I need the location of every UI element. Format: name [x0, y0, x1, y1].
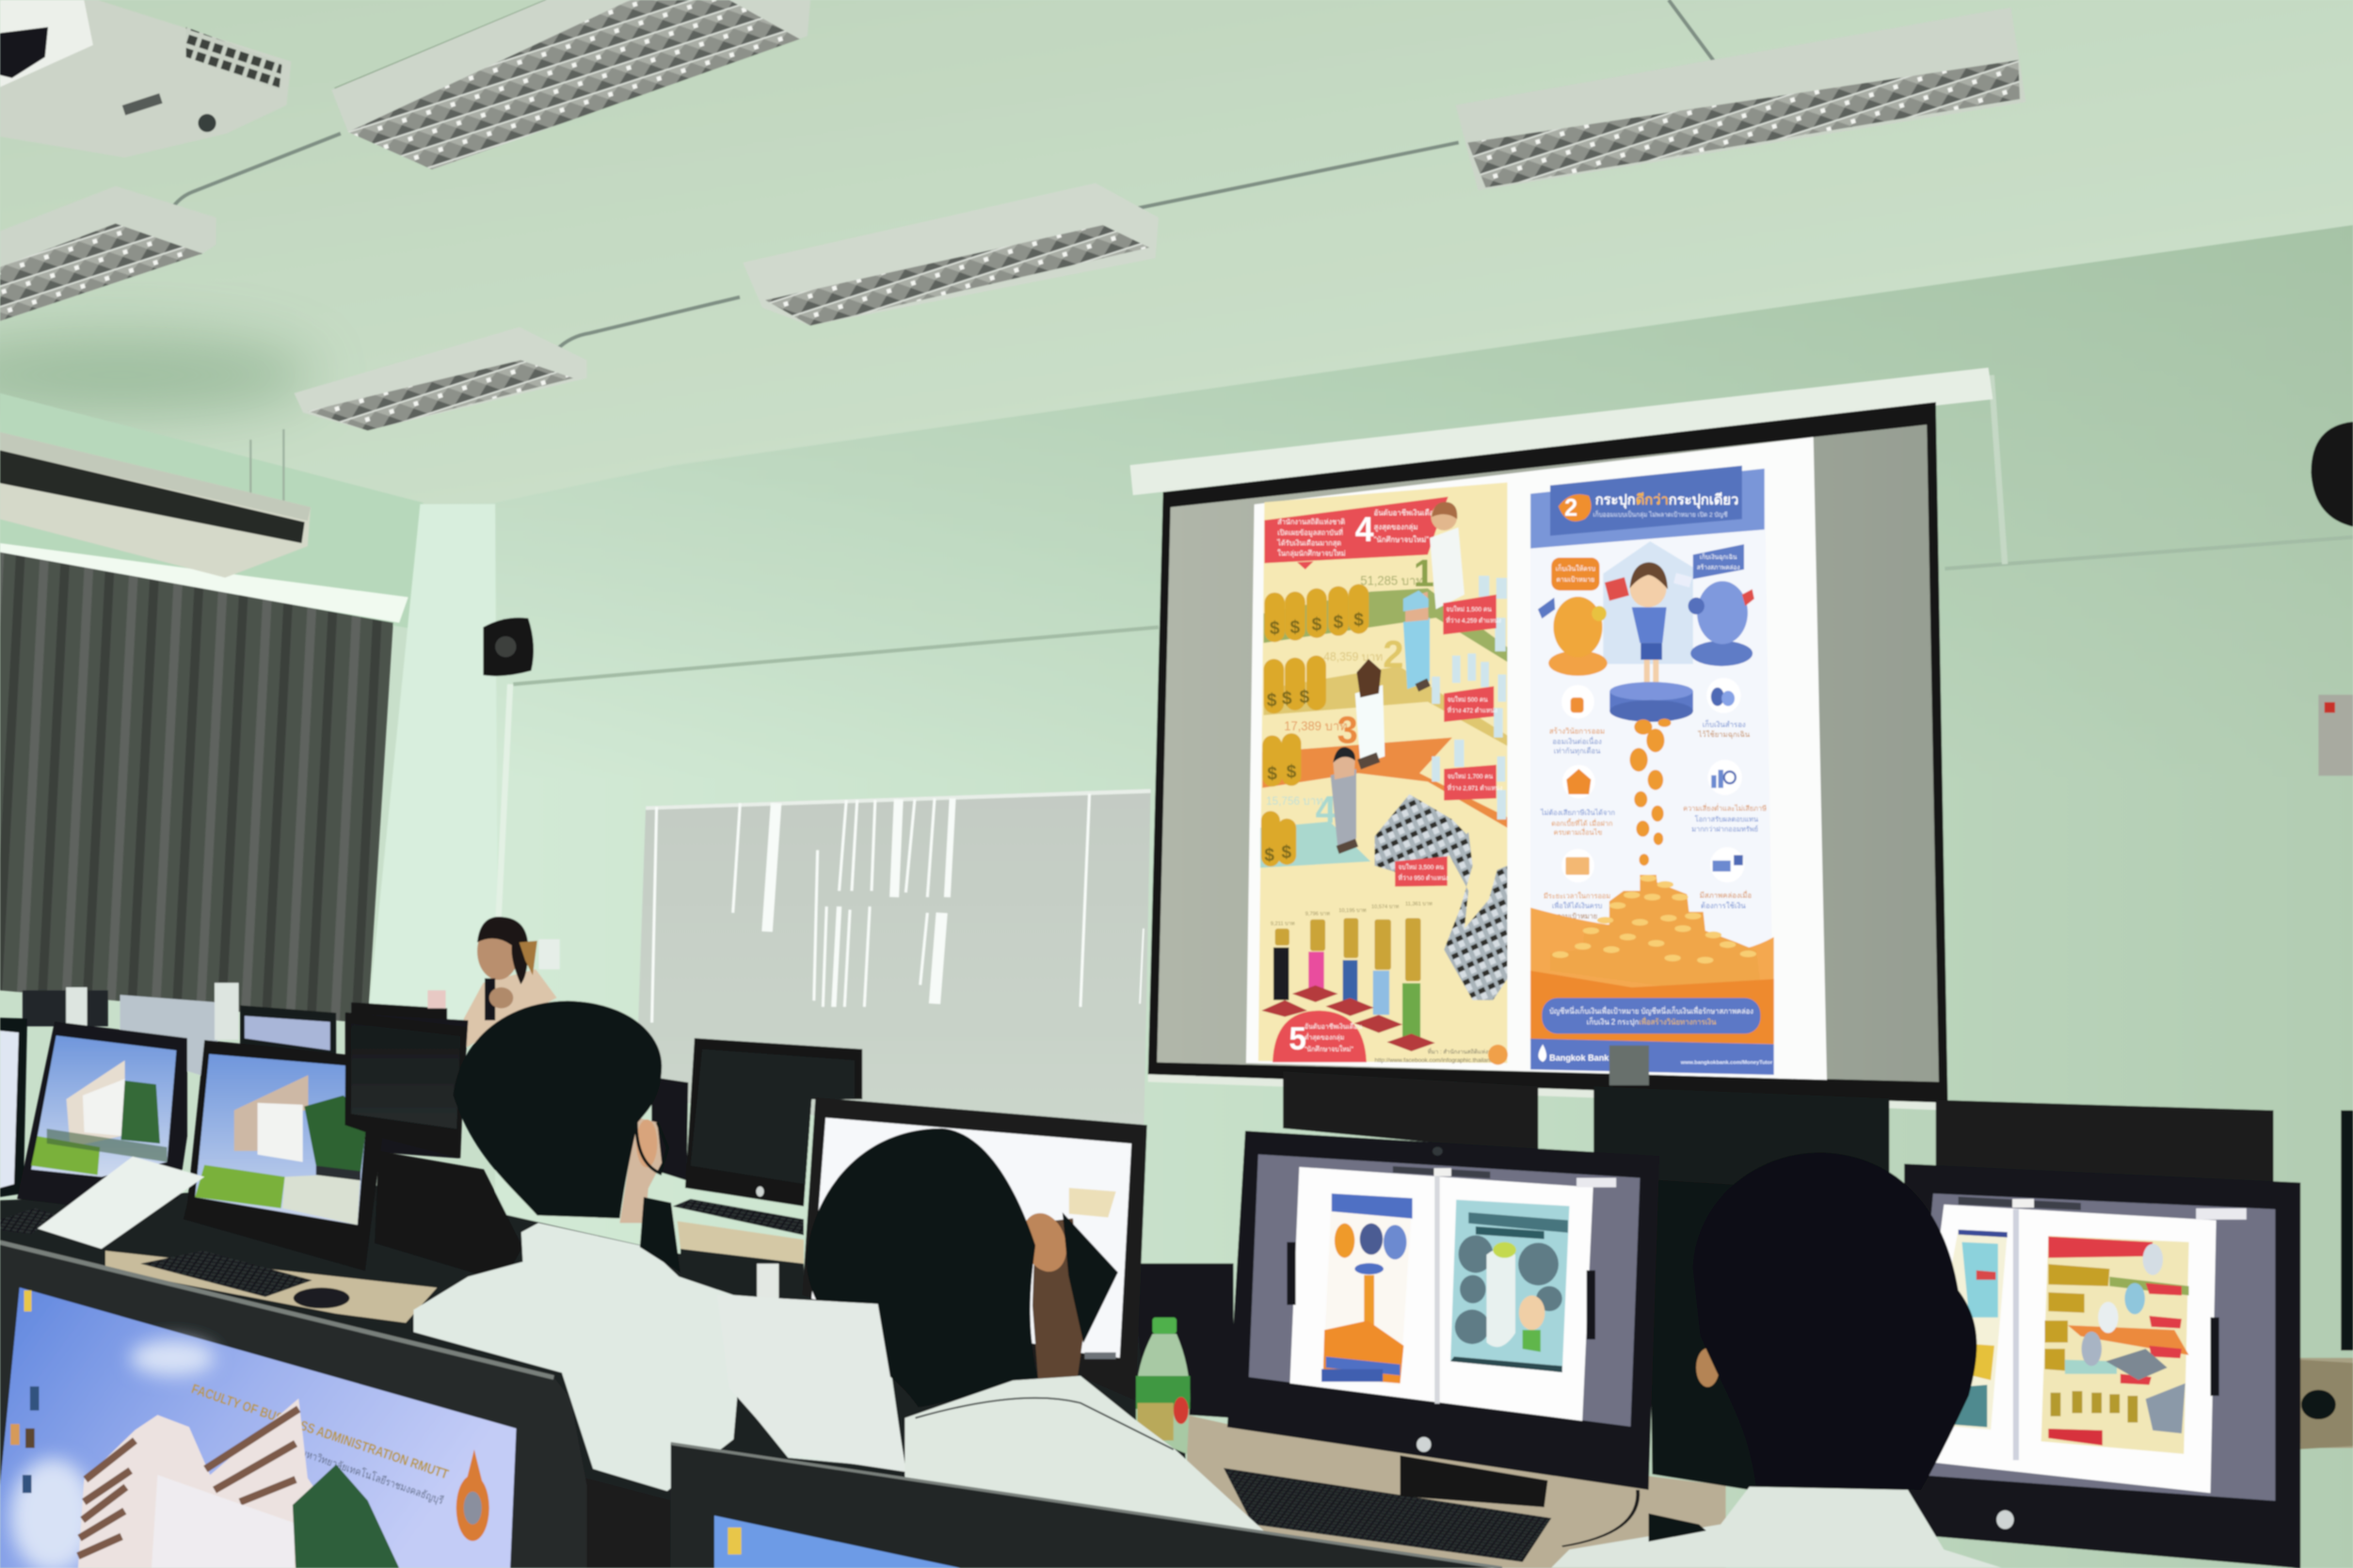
- coin stacks: $: [1290, 616, 1300, 637]
- left benefit: saving discipline: เท่ากันทุกเดือน: [1554, 746, 1601, 756]
- slide white page: [1246, 437, 1827, 1080]
- coin stacks: $: [1287, 761, 1297, 782]
- ceiling shadow near air conditioner: [0, 333, 315, 417]
- reader side handles: [1287, 1242, 1595, 1339]
- coin pyramid: [1550, 875, 1760, 987]
- coin stacks: $: [1353, 609, 1364, 630]
- left keyboard: [0, 1208, 58, 1234]
- salary figures: [1266, 551, 1434, 831]
- crowd of graduates: [1375, 794, 1507, 1000]
- salary band green: [1264, 588, 1507, 662]
- callout boxes: ที่ว่าง 472 ตำแหน่ง: [1448, 706, 1497, 714]
- projector screen housing: [1130, 368, 1993, 495]
- ceiling light 3: [743, 183, 1159, 326]
- lowest salary coin stacks and figures: 9,796 บาท: [1305, 911, 1330, 917]
- salary figures: 51,285 บาท: [1360, 573, 1424, 588]
- monitor C bezel and screen: [802, 1097, 1147, 1400]
- left benefit: saving discipline: ออมเงินต่อเนื่อง: [1552, 736, 1602, 746]
- desktop tree: [293, 1464, 399, 1568]
- left benefit: saving period: เพื่อให้ได้เงินครบ: [1552, 901, 1603, 910]
- lowest salary heading: 5: [1289, 1022, 1306, 1057]
- foreground monitor G: [671, 1444, 1502, 1568]
- dark monitor behind student 1: [344, 1013, 466, 1159]
- projection screen: [1148, 402, 1948, 1111]
- left benefit: tax free interest: ไม่ต้องเสียภาษีเงินได้จาก: [1540, 808, 1615, 817]
- right benefit: low risk: มากกว่าฝากออมทรัพย์: [1691, 824, 1758, 834]
- salary figures: 48,359 บาท: [1323, 650, 1383, 664]
- bank footer: [1530, 1039, 1774, 1075]
- salary figures: 15,756 บาท: [1266, 794, 1323, 808]
- far-left monitor: [0, 1017, 27, 1197]
- desktop campus building: [78, 1399, 323, 1568]
- poster header: "นักศึกษาจบใหม่": [1374, 536, 1429, 544]
- left benefit: saving period: ตามเป้าหมาย: [1557, 912, 1597, 920]
- chair near student 2: [640, 1197, 680, 1272]
- lowest salary coin stacks and figures: 9,211 บาท: [1271, 921, 1295, 927]
- title banner: เก็บออมแบบเป็นกลุ่ม ไม่พลาดเป้าหมาย เปิด 2 บัญชี: [1593, 510, 1728, 519]
- left benefit: tax free interest: ดอกเบี้ยที่ได้ เมื่อฝาก: [1551, 818, 1612, 827]
- coin stacks: $: [1300, 686, 1309, 708]
- poster header: 4: [1355, 510, 1373, 549]
- desktop icons: [10, 1290, 39, 1493]
- student 1 shirt: [413, 1223, 905, 1491]
- summary ribbon: บัญชีหนึ่งเก็บเงินเพื่อเป้าหมาย บัญชีหนึ่งเก็บเงินเพื่อรักษาสภาพคล่อง: [1549, 1005, 1753, 1016]
- right desk surface: [1187, 1415, 1726, 1568]
- callout boxes: ที่ว่าง 950 ตำแหน่ง: [1399, 873, 1449, 882]
- poster header: [1264, 497, 1449, 569]
- falling coins: [1630, 718, 1671, 866]
- coin stacks: $: [1264, 844, 1274, 865]
- bank footer: www.bangkokbank.com/MoneyTutor: [1680, 1060, 1773, 1065]
- ceiling panel seam: [335, 0, 546, 88]
- coin stacks: $: [1334, 612, 1343, 632]
- ceiling light 2: [1456, 8, 2025, 190]
- page 1 infographic: [1321, 1193, 1413, 1384]
- lowest salary coin stacks and figures: [1261, 902, 1435, 1051]
- right speaker: [2311, 422, 2353, 527]
- left benefit: tax free interest: ครบตามเงื่อนไข: [1554, 827, 1602, 837]
- callout boxes: ที่ว่าง 2,971 ตำแหน่ง: [1448, 783, 1502, 792]
- salary figures: 4: [1316, 788, 1337, 831]
- student 3 shirt: [1551, 1487, 2002, 1568]
- poster source: http://www.facebook.com/infographic.thailand: [1375, 1058, 1494, 1064]
- black chair: [375, 1151, 522, 1282]
- dark underlay below desks: [0, 1185, 1186, 1568]
- poster source: ที่มา : สำนักงานสถิติแห่งชาติ: [1428, 1048, 1498, 1056]
- characters: doctors and graduates: [1331, 502, 1465, 854]
- front right workstations group: [1224, 1129, 2353, 1568]
- webcam: [1433, 1146, 1443, 1156]
- orange piggy bank: ตามเป้าหมาย: [1557, 576, 1594, 584]
- monitor E: [1904, 1163, 2300, 1568]
- window light strip: [0, 543, 408, 623]
- coin stacks: $: [1270, 617, 1280, 638]
- black mouse far right: [2301, 1390, 2336, 1419]
- back row monitors: [23, 983, 447, 1080]
- dark chair near monitor D: [1133, 1263, 1234, 1418]
- title banner: 2: [1564, 495, 1577, 521]
- student 2 neck: [1032, 1219, 1083, 1384]
- blue piggy bank: สร้างสภาพคล่อง: [1697, 564, 1740, 571]
- ceiling light 4: [0, 186, 216, 321]
- callout boxes: จบใหม่ 1,500 คน: [1446, 606, 1492, 614]
- reader page: [1289, 1167, 1593, 1421]
- summary ribbon: เก็บเงิน 2 กระปุกเพื่อสร้างวินัยทางการเงิน: [1587, 1016, 1717, 1026]
- wallpaper clouds: [10, 1340, 215, 1568]
- student 1 ear: [636, 1119, 657, 1167]
- left poster: salaries: [1258, 483, 1508, 1064]
- coin stacks: $: [1282, 841, 1291, 863]
- right benefit: low risk: ความเสี่ยงต่ำและไม่เสียภาษี: [1683, 804, 1767, 813]
- blue piggy bank: เก็บเงินฉุกเฉิน: [1700, 552, 1737, 561]
- monitor A: [17, 1021, 187, 1208]
- coin stacks: $: [1267, 690, 1277, 711]
- right benefit: liquidity: [1700, 847, 1752, 910]
- back wall top shading: [495, 225, 2353, 780]
- student 2 hair: [806, 1128, 1038, 1407]
- monitor C group: [640, 1097, 1147, 1400]
- student 3 hair: [1692, 1152, 1977, 1490]
- lowest salary coin stacks and figures: 10,574 บาท: [1371, 904, 1400, 910]
- left benefit: saving period: มีระยะเวลาในการออม: [1544, 891, 1610, 901]
- water bottle: [1136, 1318, 1190, 1454]
- small figures crowd: [1432, 576, 1507, 820]
- ceiling projector: [0, 0, 291, 157]
- poster header: สูงสุดของกลุ่ม: [1374, 523, 1417, 533]
- page left sliver: [1922, 1229, 2008, 1430]
- hp logo: [1417, 1437, 1431, 1452]
- desktop building image: [234, 1075, 308, 1151]
- black bag on desk: [1649, 1513, 1706, 1542]
- student 2 mask: [1063, 1212, 1118, 1343]
- right far desk: [2300, 1360, 2353, 1449]
- poster header: อันดับอาชีพเงินเดือน: [1374, 508, 1439, 517]
- dark chairs behind monitors: [1649, 1179, 1904, 1490]
- right benefit: low risk: [1683, 760, 1767, 834]
- wall thermostat: [538, 939, 560, 969]
- coin stacks: $: [1282, 688, 1292, 709]
- page 2 infographic: [1450, 1200, 1569, 1372]
- desktop window: [152, 1475, 294, 1568]
- ceiling conduit pipes: [168, 0, 1720, 349]
- desktop seal: [456, 1449, 489, 1541]
- desktop wallpaper sky: [0, 1288, 516, 1568]
- whiteboard: [635, 789, 1151, 1148]
- wall conduit pipes: [498, 376, 2353, 922]
- bank building behind employee: [1603, 541, 1693, 664]
- coin stacks: $: [1312, 615, 1321, 635]
- coin stacks: [1261, 584, 1369, 867]
- orange hills: [1530, 907, 1774, 1042]
- ceiling light 1: [331, 0, 810, 169]
- monitor row 2: [651, 1038, 862, 1207]
- left benefit: saving discipline: สร้างวินัยการออม: [1549, 727, 1605, 736]
- ceiling light 5: [294, 328, 586, 431]
- left benefit: tax free interest: [1540, 765, 1615, 837]
- salary band yellow: [1264, 666, 1507, 746]
- bank employee figure: [1605, 562, 1692, 687]
- callout boxes: จบใหม่ 500 คน: [1448, 696, 1488, 704]
- keyboard front of monitor B: [140, 1251, 312, 1297]
- back right monitors: [1283, 1071, 2273, 1200]
- callout boxes: จบใหม่ 3,500 คน: [1399, 863, 1444, 871]
- callout boxes: ที่ว่าง 4,259 ตำแหน่ง: [1446, 616, 1501, 625]
- salary band orange: [1262, 738, 1507, 828]
- callout boxes: จบใหม่ 1,700 คน: [1448, 773, 1494, 780]
- podium camera shadow: [1609, 1046, 1649, 1085]
- wallpaper thai subtitle: มหาวิทยาลัยเทคโนโลยีราชมงคลธัญบุรี: [299, 1446, 445, 1507]
- student 2 collar line: [916, 1398, 1174, 1449]
- lowest salary heading: ต่ำสุดของกลุ่ม: [1305, 1032, 1344, 1042]
- far monitor column: [345, 1013, 468, 1159]
- orange piggy bank: [1538, 558, 1608, 676]
- lowest salary coin stacks and figures: 10,195 บาท: [1338, 908, 1367, 914]
- poster source: [1375, 1045, 1508, 1064]
- student 1 mask strap: [636, 1123, 668, 1174]
- blue piggy bank: [1689, 544, 1754, 666]
- salary band teal: [1260, 822, 1370, 868]
- keyboard: [1224, 1468, 1551, 1562]
- foreground monitor F: [0, 1242, 586, 1568]
- chair between front monitors: [585, 1478, 671, 1568]
- faculty wallpaper title: FACULTY OF BUSINESS ADMINISTRATION RMUTT: [189, 1382, 450, 1482]
- left benefit: saving discipline: [1549, 685, 1605, 756]
- salary figures: 17,389 บาท: [1284, 719, 1348, 733]
- page right mini infographic: [2041, 1236, 2189, 1454]
- air conditioner: [0, 429, 311, 578]
- presenter: [464, 917, 557, 1048]
- projected slide: [1246, 437, 1827, 1085]
- lowest salary coin stacks and figures: 11,361 บาท: [1405, 902, 1433, 907]
- cable: [1562, 1490, 1638, 1546]
- paper held up: [38, 1157, 204, 1249]
- monitor B: [184, 1040, 384, 1271]
- poster header: เปิดเผยข้อมูลสถาบันที่: [1277, 527, 1343, 536]
- wall alarm box: [2318, 695, 2353, 776]
- left monitors and student 1 body group: [0, 1013, 905, 1491]
- left speaker: [483, 617, 534, 676]
- ceiling: [0, 0, 2353, 504]
- right poster: savings: [1530, 466, 1774, 1075]
- left benefit: saving period: [1544, 849, 1610, 920]
- coin stacks: $: [1267, 763, 1277, 784]
- back wall: [495, 225, 2353, 1568]
- computer mouse: [294, 1288, 349, 1308]
- poster header: ในกลุ่มนักศึกษาจบใหม่: [1277, 550, 1346, 558]
- poster header: ได้รับเงินเดือนมากสุด: [1276, 538, 1341, 548]
- monitor D stand: [1401, 1455, 1547, 1507]
- lowest salary heading: อันดับอาชีพเงินเดือน: [1305, 1023, 1362, 1031]
- orange piggy bank: เก็บเงินให้ครบ: [1556, 564, 1595, 572]
- right benefit: low risk: โอกาสรับผลตอบแทน: [1695, 815, 1758, 824]
- summary ribbon: [1530, 970, 1774, 1044]
- bank footer: Bangkok Bank: [1549, 1053, 1609, 1063]
- far right monitor edge: [2341, 1111, 2353, 1351]
- handout paper: [717, 1295, 906, 1472]
- left side wall: [0, 393, 498, 1035]
- right benefit: emergency reserve: ไว้ใช้ยามฉุกเฉิน: [1697, 730, 1751, 739]
- right benefit: emergency reserve: [1697, 678, 1751, 739]
- callout boxes: [1395, 595, 1502, 887]
- right benefit: liquidity: ต้องการใช้เงิน: [1701, 902, 1746, 910]
- title banner: กระปุกดีกว่ากระปุกเดียว: [1595, 492, 1738, 508]
- lowest salary heading: "นักศึกษาจบใหม่": [1305, 1045, 1353, 1053]
- salary figures: 2: [1383, 632, 1403, 676]
- salary figures: 1: [1414, 551, 1434, 595]
- student 3 ear: [1696, 1348, 1720, 1387]
- student 2 ear: [1016, 1208, 1074, 1277]
- student 1 hair: [454, 1000, 662, 1219]
- desk behind student: [673, 1199, 804, 1299]
- far right monitor base: [2342, 1129, 2353, 1349]
- curtain: [0, 552, 393, 1023]
- right benefit: liquidity: มีสภาพคล่องเมื่อ: [1700, 889, 1752, 900]
- toolbar: [1393, 1166, 1490, 1178]
- right benefit: emergency reserve: เก็บเงินสำรอง: [1703, 719, 1746, 728]
- salary figures: 3: [1337, 708, 1358, 752]
- desk right back: [2251, 1358, 2353, 1448]
- title banner: [1530, 466, 1765, 549]
- lowest salary heading: [1273, 1011, 1367, 1063]
- poster header: สำนักงานสถิติแห่งชาติ: [1277, 518, 1345, 526]
- student 1 neck and ear: [619, 1118, 662, 1223]
- student 2 shirt: [904, 1376, 1293, 1568]
- front desk left: [105, 1251, 437, 1322]
- monitor D: [1227, 1131, 1659, 1490]
- coin slot pedestal: [1609, 682, 1693, 722]
